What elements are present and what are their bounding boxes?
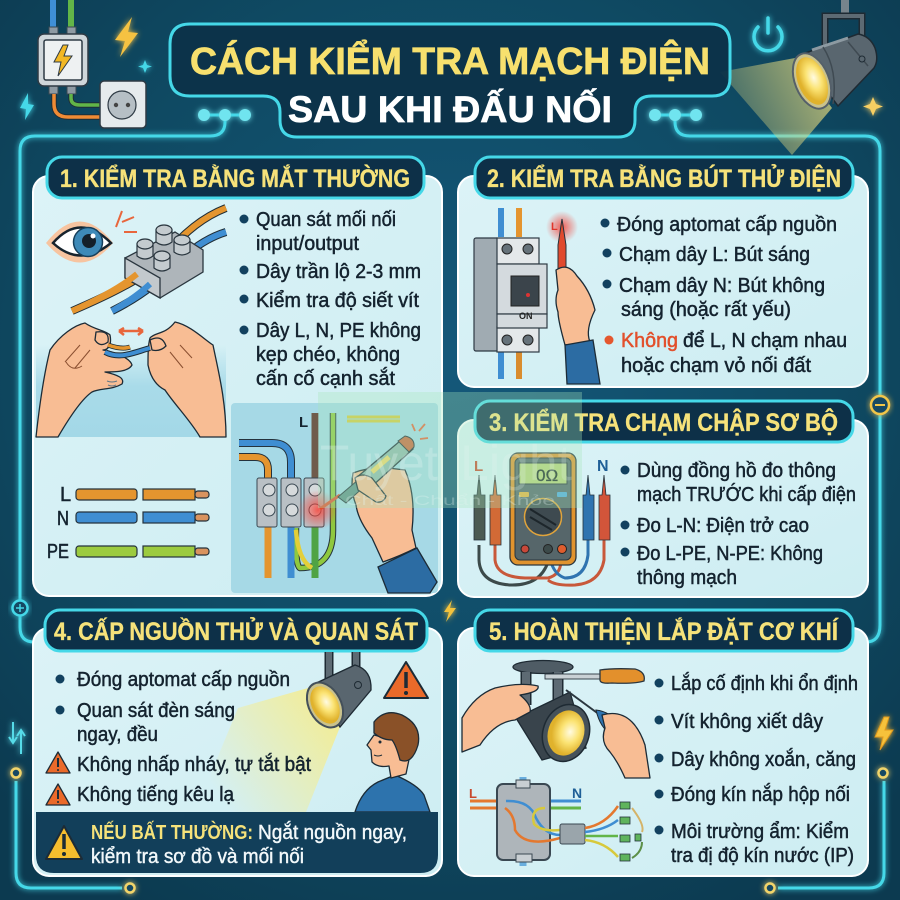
illustration: circuit breaker: ON [519, 311, 532, 321]
icon: spotlight [300, 652, 371, 734]
bullet list panel 1 [240, 209, 421, 390]
bullet list panel 5: tra đị độ kín nước (IP) [671, 845, 854, 867]
bullet list panel 5: Môi trường ẩm: Kiểm [671, 821, 849, 843]
spotlight beam top [720, 58, 832, 155]
title line 2: SAU KHI ĐẤU NỐI [288, 88, 612, 130]
panel 1: visual check [33, 157, 442, 596]
bullet list panel 3: mạch TRƯỚC khi cấp điện [637, 483, 856, 506]
bullet list panel 4: Đóng aptomat cấp nguồn [77, 669, 290, 691]
warning footer: Ngắt nguồn ngay, [258, 821, 407, 844]
bullet list panel 4: Không nhấp nháy, tự tắt bật [77, 753, 311, 776]
panel 1 heading [47, 157, 424, 198]
bullet list panel 3: thông mạch [637, 567, 737, 589]
bullet list panel 3 [620, 460, 856, 589]
icon: gold sparkle [863, 97, 883, 116]
bullet list panel 1: Quan sát mối nối [256, 209, 396, 231]
wire legend [47, 484, 209, 563]
bullet list panel 3: Dùng đồng hồ đo thông [637, 460, 836, 482]
bullet list panel 5: Vít không xiết dây [671, 711, 823, 733]
bullet list panel 2: sáng (hoặc rất yếu) [621, 299, 791, 321]
icon: lightning right [875, 717, 893, 750]
illustration: person [355, 713, 430, 812]
bullet list panel 5: Đóng kín nắp hộp nối [671, 783, 850, 806]
bullet list panel 4 [56, 669, 311, 806]
bullet list panel 5: Lắp cố định khi ổn định [671, 672, 858, 695]
panel 4: power test [33, 610, 442, 876]
icon: teal bolt [20, 93, 34, 120]
panel 5 heading: 5. HOÀN THIỆN LẮP ĐẶT CƠ KHÍ [489, 616, 839, 646]
warning footer [36, 812, 438, 873]
title banner [170, 24, 730, 137]
icon: wire connector [72, 208, 226, 311]
bullet list panel 1: kẹp chéo, không [256, 344, 400, 366]
icon: junction box and socket [38, 0, 146, 128]
bullet list panel 4: Không tiếng kêu lạ [77, 784, 235, 806]
bullet list panel 2: Chạm dây N: Bút không [619, 275, 825, 297]
bullet list panel 4: ngay, đều [77, 724, 158, 746]
illustration: terminal test: L [299, 414, 308, 431]
panel 2 heading [475, 157, 853, 198]
bullet list panel 2: hoặc chạm vỏ nối đất [621, 355, 811, 377]
wire legend: N [57, 508, 69, 530]
illustration: circuit breaker [474, 208, 547, 379]
panel 3: continuity check [458, 401, 868, 597]
panel 4 heading [45, 610, 427, 651]
bullet list panel 1: Kiểm tra độ siết vít [256, 290, 419, 312]
panel 3 heading [475, 401, 853, 442]
illustration: multimeter and probes: N [597, 458, 609, 475]
icon: warning small 2 [46, 784, 70, 805]
icon: current arrows [9, 722, 25, 754]
illustration: multimeter and probes [474, 453, 610, 585]
bullet list panel 2: Chạm dây L: Bút sáng [619, 244, 810, 266]
illustration: hands tugging wires [36, 322, 226, 437]
panel 4 heading: 4. CẤP NGUỒN THỬ VÀ QUAN SÁT [54, 616, 418, 646]
watermark: Chất - Chuẩn - Khỏe [345, 492, 555, 508]
icon: small lightning center [444, 600, 456, 622]
watermark: Tuyet [320, 435, 438, 491]
beam panel 4 [195, 688, 340, 812]
wire legend: L [60, 484, 71, 506]
illustration: multimeter and probes: L [474, 458, 483, 475]
panel 5 heading [475, 610, 853, 651]
illustration: tester pen in hand [546, 211, 600, 384]
icon: warning yellow [46, 826, 82, 859]
illustration: junction box wiring [469, 777, 643, 866]
warning footer: kiểm tra sơ đồ và mối nối [91, 846, 304, 868]
illustration: tester pen in hand: L [551, 221, 558, 233]
panel 3 heading: 3. KIỂM TRA CHẠM CHẬP SƠ BỘ [489, 407, 838, 437]
panel 5: mechanical finish [458, 610, 868, 876]
spotlight lamp top right [785, 0, 877, 114]
bullet list panel 1: cấn cố cạnh sắt [256, 367, 395, 390]
warning footer: NẾU BẤT THƯỜNG: [91, 820, 253, 844]
bullet list panel 2: để L, N chạm nhau [683, 330, 847, 352]
illustration: terminal test [231, 403, 438, 593]
watermark [318, 392, 582, 508]
wire legend: PE [47, 541, 69, 563]
panel 2: voltage tester [458, 157, 868, 387]
bullet list panel 1: input/output [256, 233, 359, 255]
icon: warning small 1 [46, 752, 70, 773]
illustration: junction box wiring: L [469, 786, 477, 801]
title line 1: CÁCH KIỂM TRA MẠCH ĐIỆN [190, 38, 710, 83]
bullet list panel 2: Đóng aptomat cấp nguồn [617, 214, 837, 236]
icon: node dots bottom [12, 768, 888, 892]
bullet list panel 2: Không [621, 330, 678, 352]
illustration: multimeter and probes: 0Ω [536, 466, 558, 485]
bullet list panel 1: Dây trần lộ 2-3 mm [256, 261, 421, 283]
bullet list panel 2 [600, 214, 847, 377]
icon: plus node [12, 600, 28, 616]
icon: minus node [871, 396, 889, 414]
icon: power symbol [754, 18, 782, 51]
bullet list panel 3: Đo L-N: Điện trở cao [637, 515, 809, 537]
icon: glowing bolt [115, 17, 138, 57]
watermark: Light [460, 435, 572, 491]
icon: eye [46, 211, 137, 262]
bullet list panel 4: Quan sát đèn sáng [77, 700, 235, 722]
panel 1 heading: 1. KIỂM TRA BẰNG MẮT THƯỜNG [60, 163, 410, 193]
bullet list panel 5 [654, 672, 858, 867]
icon: warning orange [384, 662, 428, 698]
bullet list panel 1: Dây L, N, PE không [256, 320, 421, 342]
illustration: installing lamp [462, 660, 650, 778]
illustration: junction box wiring: N [572, 785, 582, 801]
icon: teal sparkle [138, 60, 152, 73]
bullet list panel 5: Dây không xoắn, căng [671, 748, 856, 771]
panel 2 heading: 2. KIỂM TRA BẰNG BÚT THỬ ĐIỆN [487, 163, 841, 193]
bullet list panel 3: Đo L-PE, N-PE: Không [637, 543, 823, 565]
